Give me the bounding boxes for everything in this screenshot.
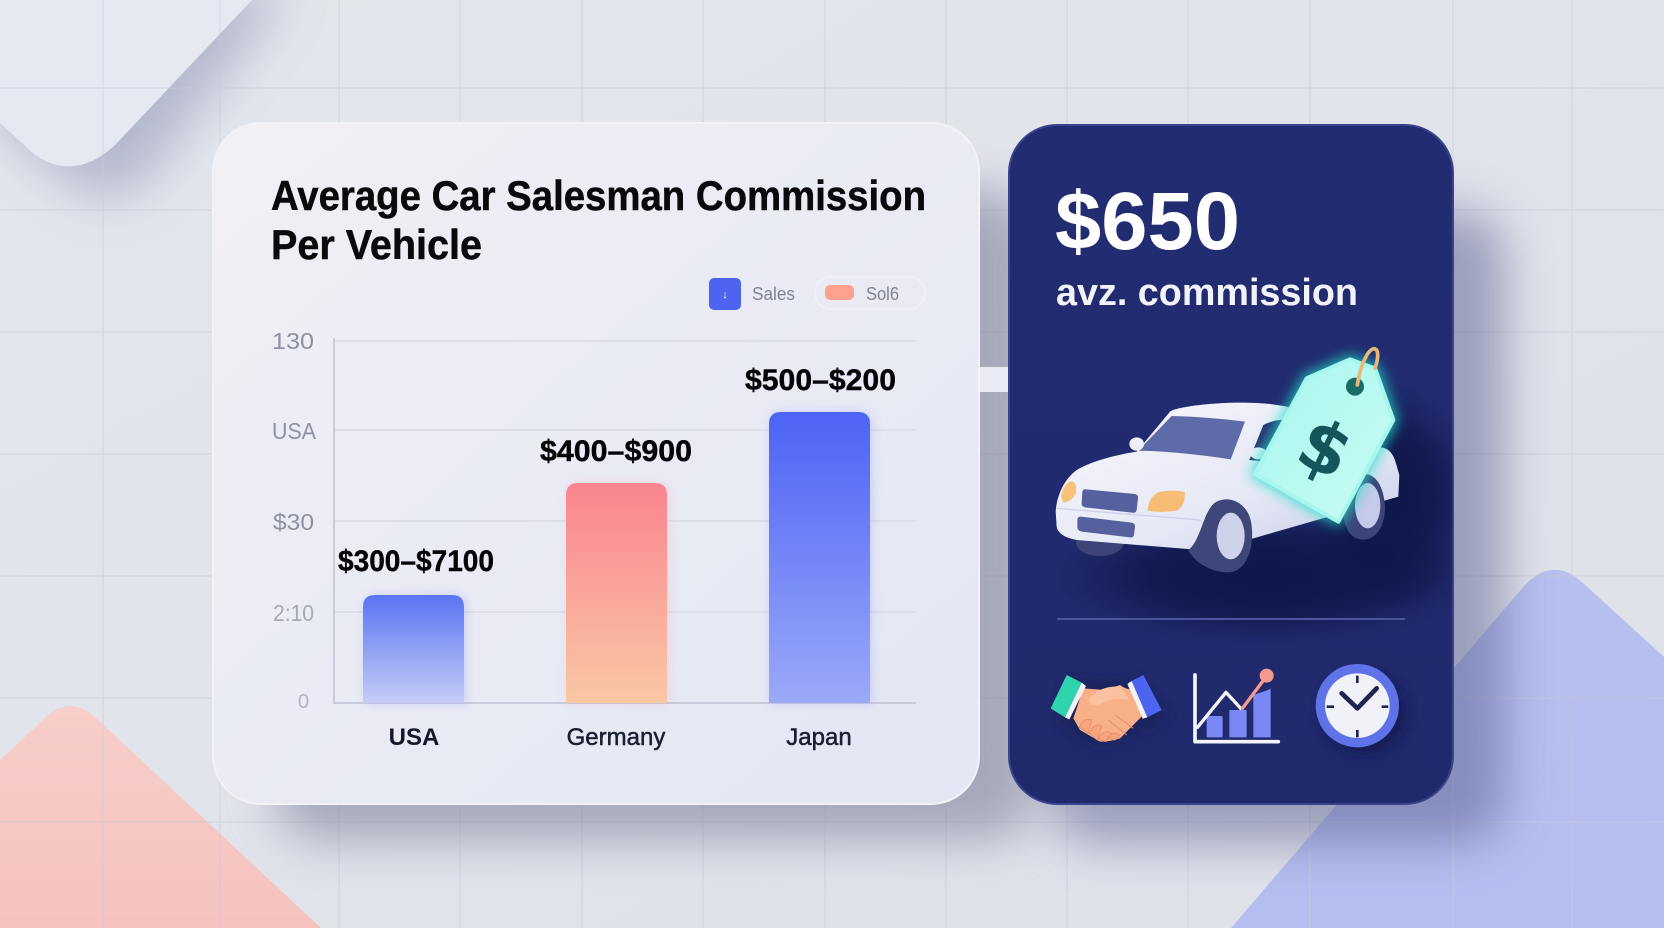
- price tag: [1255, 349, 1393, 522]
- legend: Sol6: [866, 284, 899, 304]
- icon: clock: [1316, 664, 1405, 753]
- legend: Sales: [752, 284, 795, 304]
- y axis labels: 0: [298, 691, 309, 713]
- panel: commission chart: [213, 123, 979, 804]
- panel: average commission: [1009, 125, 1480, 804]
- chart gridlines and axes: [334, 338, 916, 703]
- divider: [1057, 618, 1405, 620]
- bar: USA: USA: [389, 724, 439, 751]
- bar: Germany: Germany: [567, 724, 665, 751]
- bar: USA: [338, 545, 494, 751]
- title: Per Vehicle: [271, 221, 482, 268]
- title: [271, 172, 926, 268]
- icon: growth chart: [1195, 669, 1278, 742]
- y axis labels: 2:10: [273, 600, 314, 626]
- title: Average Car Salesman Commission: [271, 172, 926, 219]
- bar: Germany: $400–$900: [540, 435, 692, 468]
- bar: USA: $300–$7100: [338, 545, 494, 578]
- y axis labels: [272, 328, 317, 713]
- bar: Japan: $500–$200: [745, 364, 896, 397]
- legend: [709, 277, 925, 310]
- y axis labels: $30: [273, 509, 314, 535]
- bar: Germany: [540, 435, 692, 751]
- y axis labels: USA: [272, 418, 317, 444]
- illustration: car with price tag: [1053, 349, 1480, 643]
- bar: Japan: [745, 364, 896, 751]
- legend: ↓: [722, 289, 728, 301]
- y axis labels: 130: [272, 328, 314, 354]
- price tag: $: [1285, 400, 1365, 496]
- big number: $650: [1055, 176, 1240, 267]
- bar: Japan: Japan: [786, 724, 852, 751]
- subtitle: avz. commission: [1056, 272, 1358, 314]
- icon: handshake: [1051, 675, 1167, 747]
- connector between panels: [975, 367, 1011, 392]
- card shadows: [275, 190, 1505, 844]
- car: [1056, 403, 1399, 572]
